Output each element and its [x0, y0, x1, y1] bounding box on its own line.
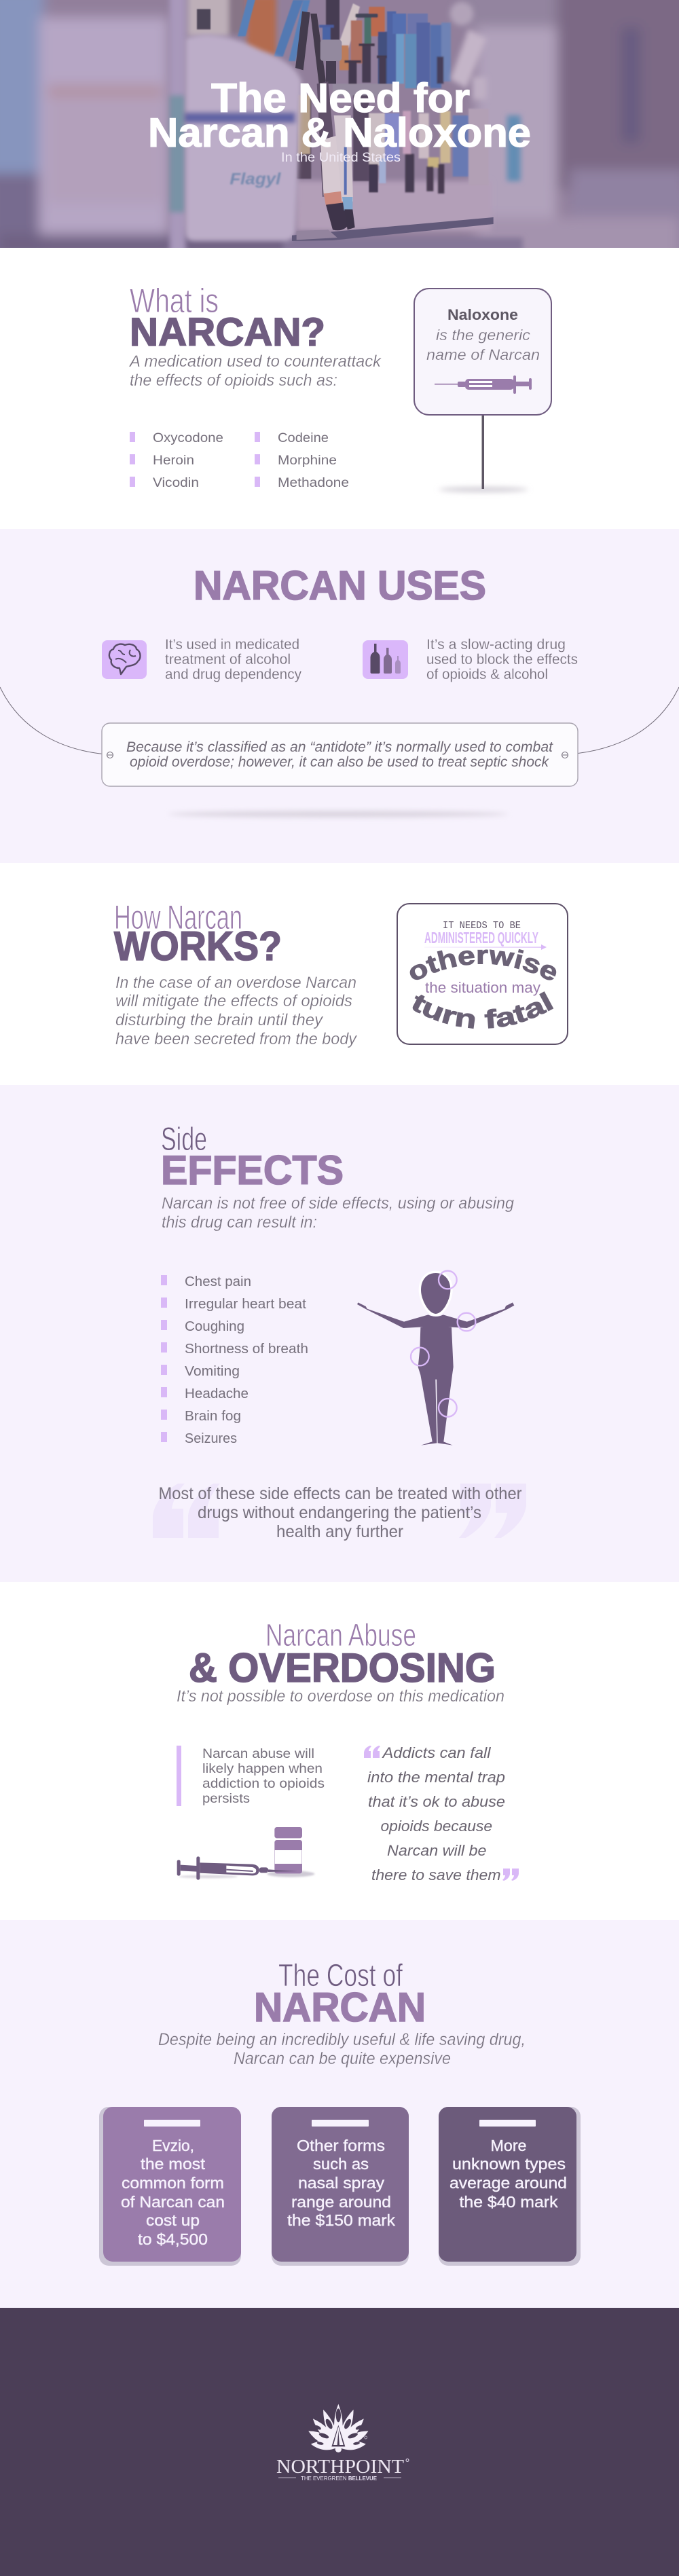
use 1 text — [165, 637, 301, 682]
pull quote — [364, 1744, 519, 1883]
cost card: nasal spray: Other forms — [297, 2137, 385, 2154]
warning card: the situation may — [425, 979, 540, 996]
cost card: nasal spray: such as — [313, 2155, 369, 2173]
ground shadow — [168, 811, 508, 817]
hero subtitle: In the United States — [281, 151, 401, 165]
cost card: unknown types: unknown types — [452, 2155, 566, 2173]
use 2 text: used to block the effects — [426, 652, 578, 667]
signpost: Naloxone — [414, 289, 551, 492]
signpost: Naloxone: Naloxone — [447, 306, 518, 323]
opioid list: Codeine — [278, 431, 329, 445]
explanation text: will mitigate the effects of opioids — [115, 992, 352, 1010]
heading: abuse and overdosing — [189, 1617, 496, 1691]
heading: side effects: EFFECTS — [161, 1147, 344, 1193]
warning card — [397, 903, 568, 1045]
closing note: drugs without endangering the patient’s — [198, 1503, 481, 1522]
closing note — [159, 1484, 521, 1541]
explanation text: In the case of an overdose Narcan — [115, 974, 356, 992]
abuse note: persists — [202, 1791, 250, 1806]
use 2 text: of opioids & alcohol — [426, 667, 548, 682]
front syringes — [295, 12, 310, 70]
heading: side effects — [161, 1122, 344, 1193]
symptom list: Irregular heart beat — [185, 1297, 306, 1312]
signpost: Naloxone: name of Narcan — [426, 346, 540, 363]
pull quote: Addicts can fall — [381, 1744, 492, 1761]
hero title: The Need for — [211, 75, 470, 121]
subheading: It’s not possible to overdose on this medication — [177, 1687, 504, 1706]
abuse note — [177, 1746, 325, 1806]
intro text: this drug can result in: — [162, 1213, 317, 1232]
explanation text — [115, 974, 358, 1048]
icon: bottles — [363, 640, 408, 679]
explanation text: disturbing the brain until they — [115, 1011, 324, 1029]
symptom list: Seizures — [185, 1431, 237, 1446]
symptom list: Shortness of breath — [185, 1342, 308, 1357]
warning card: IT NEEDS TO BE — [443, 920, 521, 932]
cost card: Evzio: cost up — [146, 2211, 200, 2229]
cost card: nasal spray: the $150 mark — [287, 2211, 396, 2229]
closing note: Most of these side effects can be treated with other — [159, 1484, 521, 1503]
logo wordmark: NORTHPOINT — [276, 2457, 404, 2478]
use 2 text — [426, 637, 578, 682]
symptom list: Chest pain — [185, 1274, 251, 1289]
arrow — [424, 944, 547, 950]
heading: cost of Narcan: The Cost of — [278, 1957, 403, 1993]
hero banner — [0, 0, 679, 261]
symptom list: Headache — [185, 1386, 249, 1401]
icon: syringe — [435, 375, 532, 394]
cost card: Evzio: of Narcan can — [121, 2193, 225, 2211]
heading: abuse and overdosing: Narcan Abuse — [265, 1617, 416, 1653]
heading: Narcan uses: NARCAN USES — [194, 563, 486, 608]
abuse note: Narcan abuse will — [202, 1746, 314, 1761]
icon: brain — [102, 640, 147, 679]
heading: What is Narcan — [130, 282, 325, 354]
cost card: Evzio: the most — [141, 2155, 206, 2173]
opioid list: Methadone — [278, 476, 349, 490]
callout: antidote — [102, 723, 578, 786]
heading: how Narcan works — [114, 898, 282, 969]
opioid list: Oxycodone — [153, 431, 223, 445]
warning card: otherwise — [410, 949, 557, 980]
heading: abuse and overdosing: & OVERDOSING — [189, 1645, 496, 1691]
hero background photo: blurred medicine shelf — [0, 0, 679, 261]
symptom list: Coughing — [185, 1319, 244, 1334]
cost card: unknown types: average around — [449, 2174, 567, 2192]
logo wordmark: THE EVERGREEN BELLEVUE — [301, 2476, 378, 2482]
warning card: turn fatal — [413, 991, 554, 1029]
use 2 text: It’s a slow-acting drug — [426, 637, 566, 652]
panel: what is Narcan — [0, 248, 679, 529]
hero title — [148, 75, 531, 155]
opioid list: Heroin — [153, 454, 194, 468]
intro text: Narcan can be quite expensive — [234, 2049, 451, 2068]
cost card: nasal spray: nasal spray — [298, 2174, 385, 2192]
intro text: Despite being an incredibly useful & life saving drug, — [158, 2030, 526, 2049]
callout: antidote: Because it’s classified as an “antidote” it’s normally used to combat — [126, 739, 553, 755]
jar — [185, 35, 301, 241]
pull quote: that it’s ok to abuse — [368, 1793, 505, 1810]
heading: how Narcan works: How Narcan — [114, 898, 242, 936]
human figure with pain markers — [357, 1271, 514, 1446]
cost card: Evzio — [99, 2107, 241, 2266]
symptom list: Brain fog — [185, 1409, 241, 1424]
panel: Narcan uses — [0, 529, 679, 863]
opioid list: Vicodin — [153, 476, 199, 490]
connector curves — [0, 687, 679, 754]
cost card: unknown types: the $40 mark — [459, 2193, 558, 2211]
cost card: Evzio: Evzio, — [152, 2137, 194, 2154]
pull quote: into the mental trap — [367, 1769, 505, 1786]
intro text — [158, 2030, 526, 2068]
use 1 text: and drug dependency — [165, 667, 301, 682]
cost card: unknown types: More — [490, 2137, 527, 2154]
cost card: nasal spray: range around — [291, 2193, 391, 2211]
logo: Northpoint peacock — [306, 2404, 371, 2452]
decorative quote marks — [153, 1484, 526, 1538]
cost card: Evzio: to $4,500 — [138, 2230, 208, 2248]
hero background photo: blurred medicine shelf: Flagyl — [230, 170, 282, 189]
intro text: the effects of opioids such as: — [130, 371, 337, 390]
heading: side effects: Side — [161, 1122, 207, 1158]
icon: syringe and vial — [177, 1827, 314, 1880]
pull quote: opioids because — [380, 1818, 492, 1835]
heading: how Narcan works: WORKS? — [114, 923, 282, 969]
use 1 text: treatment of alcohol — [165, 652, 291, 667]
warning card: ADMINISTERED QUICKLY — [424, 929, 538, 946]
hero title: Narcan & Naloxone — [148, 110, 531, 155]
heading: What is Narcan: NARCAN? — [130, 310, 325, 354]
abuse note: likely happen when — [202, 1761, 323, 1776]
abuse note: addiction to opioids — [202, 1776, 325, 1791]
panel: cost of Narcan — [0, 1920, 679, 2308]
panel: abuse and overdosing — [0, 1582, 679, 1920]
heading: What is Narcan: What is — [130, 282, 219, 320]
cost card: Evzio: common form — [122, 2174, 224, 2192]
symptom list — [161, 1274, 308, 1446]
opioid list — [130, 431, 349, 490]
use 1 text: It’s used in medicated — [165, 637, 299, 652]
closing note: health any further — [276, 1522, 403, 1541]
callout: antidote: opioid overdose; however, it can also be used to treat septic shock — [130, 754, 549, 770]
heading: cost of Narcan — [254, 1957, 426, 2030]
panel: side effects — [0, 1085, 679, 1582]
pull quote: there to save them — [371, 1866, 501, 1883]
explanation text: have been secreted from the body — [115, 1030, 358, 1048]
signpost: Naloxone: is the generic — [436, 327, 530, 344]
intro text — [162, 1194, 515, 1232]
opioid list: Morphine — [278, 454, 337, 468]
symptom list: Vomiting — [185, 1364, 240, 1379]
intro text — [128, 352, 382, 390]
pull quote: Narcan will be — [387, 1842, 486, 1859]
panel: footer — [0, 2308, 679, 2576]
heading: cost of Narcan: NARCAN — [254, 1985, 426, 2030]
cost card: unknown types — [439, 2107, 581, 2266]
panel: how Narcan works — [113, 898, 568, 1048]
cost card: nasal spray — [272, 2107, 409, 2266]
intro text: Narcan is not free of side effects, using or abusing — [162, 1194, 515, 1213]
intro text: A medication used to counterattack — [128, 352, 382, 371]
